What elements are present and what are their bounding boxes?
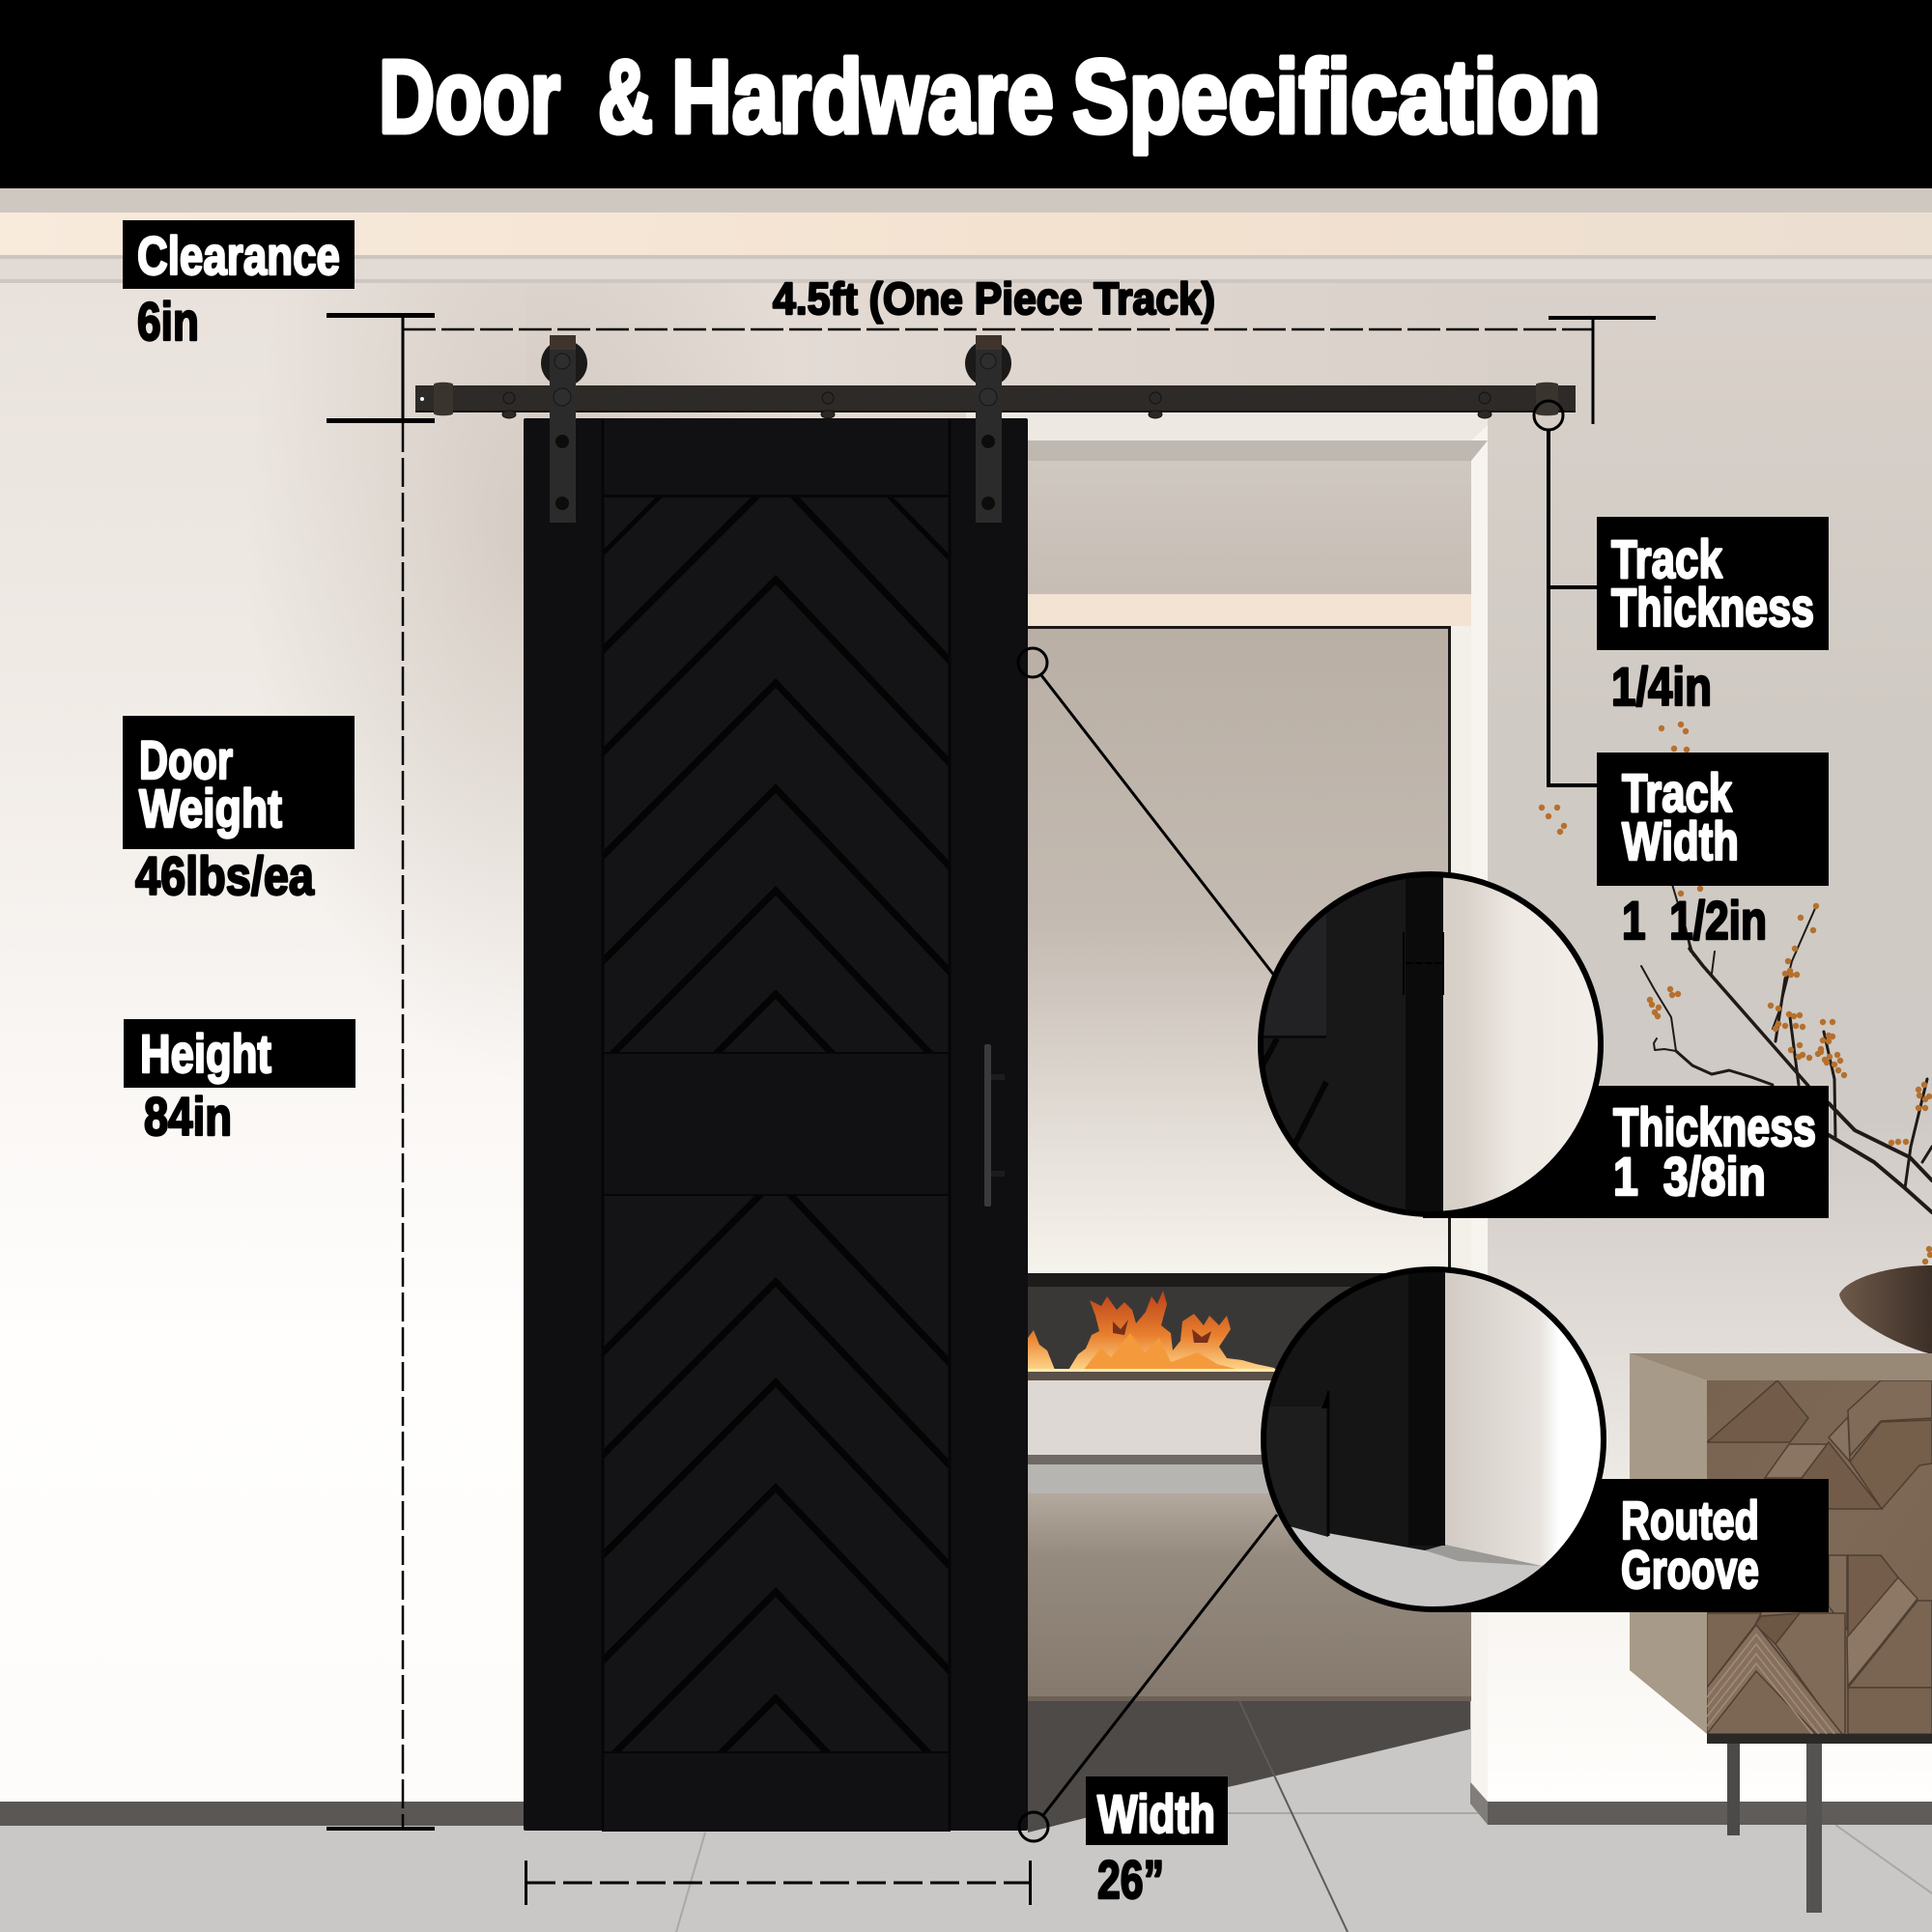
door pull handle	[984, 1044, 1005, 1207]
callout label: track width	[1597, 753, 1829, 886]
header bar	[0, 0, 1932, 188]
thickness pointer	[1018, 648, 1275, 977]
callout label: track thickness	[1597, 517, 1829, 650]
title: &	[598, 38, 653, 155]
callout label: door weight: Weight	[139, 778, 282, 838]
callout label: track thickness: Thickness	[1611, 577, 1814, 638]
track right bracket	[1548, 316, 1656, 424]
track thickness value: 1/4in	[1611, 656, 1712, 717]
title: Hardware	[671, 38, 1054, 155]
doorway jamb	[1471, 425, 1488, 1802]
chevron panel lower	[603, 1195, 950, 1752]
crown moulding	[0, 257, 1932, 280]
width dimension	[525, 1861, 1032, 1905]
cabinet legs	[1727, 1734, 1740, 1835]
track pointer lines	[1534, 401, 1598, 785]
height dimension	[327, 423, 435, 1831]
track width value: 1 1/2in	[1622, 890, 1767, 951]
skirting boards	[0, 1782, 1932, 1826]
fire burner bar	[1028, 1372, 1471, 1380]
rug	[1028, 1493, 1471, 1700]
sliding track	[415, 383, 1576, 418]
door weight value: 46lbs/ea	[135, 845, 315, 906]
magnifier: door thickness	[1261, 874, 1601, 1214]
floor	[0, 1701, 1932, 1932]
door slab	[524, 418, 1028, 1831]
vase	[1839, 1265, 1932, 1354]
end stop left	[434, 383, 453, 415]
callout label: door thickness: Thickness	[1613, 1096, 1816, 1157]
barn door	[524, 381, 1028, 1886]
cabinet front	[1707, 1380, 1932, 1734]
callout label: track width: Track	[1622, 762, 1733, 823]
ceiling cove light	[0, 213, 1932, 257]
track bar	[415, 385, 1576, 412]
track length dashed line	[403, 328, 1593, 330]
cabinet side	[1630, 1353, 1707, 1734]
top rail	[603, 418, 950, 497]
callout label: clearance: Clearance	[137, 225, 340, 286]
callout label: height	[124, 1019, 355, 1088]
light strip	[1028, 594, 1471, 626]
soft shadow near door	[246, 0, 807, 1082]
callout label: door thickness: 1 3/8in	[1613, 1146, 1766, 1207]
door casing top	[966, 412, 1488, 440]
soffit	[1028, 440, 1488, 461]
cabinet facets	[1707, 1380, 1932, 1734]
doorway and room beyond	[966, 412, 1488, 1932]
callout label: routed groove: Routed	[1621, 1490, 1759, 1550]
clearance value: 6in	[137, 291, 199, 352]
end stop right	[1536, 383, 1558, 415]
fire flames	[1028, 1291, 1277, 1372]
ceiling soffit	[0, 188, 1932, 213]
lock rail	[603, 1053, 950, 1195]
callout label: height: Height	[140, 1023, 271, 1084]
wall above door	[526, 280, 1488, 440]
title	[379, 38, 1601, 155]
height value: 84in	[144, 1086, 232, 1147]
clearance dimension bracket	[327, 313, 435, 423]
title: Door	[379, 38, 560, 155]
sideboard cabinet	[1630, 1353, 1932, 1913]
cabinet top	[1630, 1353, 1932, 1380]
magnifier: routed groove	[1264, 1269, 1604, 1609]
width value: 26”	[1097, 1849, 1164, 1910]
fireplace recess	[1028, 1273, 1471, 1380]
title: Specification	[1072, 38, 1601, 155]
far wall upper	[1028, 461, 1471, 594]
callout label: track width: Width	[1622, 810, 1739, 871]
chevron grooves lower	[605, 1196, 949, 1751]
callout label: door weight: Door	[139, 729, 233, 790]
chevron grooves upper	[605, 497, 949, 1052]
groove pointer	[1019, 1515, 1277, 1841]
callout label: routed groove	[1434, 1479, 1829, 1612]
bottom rail	[603, 1752, 950, 1831]
concrete hearth	[1028, 1380, 1471, 1455]
chevron panel upper	[603, 497, 950, 1053]
branches with berries	[1539, 722, 1932, 1264]
far floor	[1028, 1464, 1471, 1493]
stile seams	[603, 418, 950, 1831]
far wall panel	[1028, 628, 1449, 1273]
skirting far	[1028, 1455, 1471, 1464]
callout label: routed groove: Groove	[1621, 1539, 1759, 1600]
track mounting bolts	[502, 392, 1492, 418]
right wall	[1488, 280, 1932, 1802]
callout label: track thickness: Track	[1611, 528, 1723, 589]
track length label: 4.5ft (One Piece Track)	[773, 273, 1215, 324]
left wall	[0, 280, 526, 1802]
callout label: door thickness	[1423, 1086, 1829, 1218]
callout label: door weight	[123, 716, 355, 849]
left roller hanger	[541, 335, 587, 523]
right roller hanger	[965, 335, 1011, 523]
near floor shadow	[1028, 1701, 1470, 1833]
callout label: width: Width	[1097, 1783, 1215, 1844]
